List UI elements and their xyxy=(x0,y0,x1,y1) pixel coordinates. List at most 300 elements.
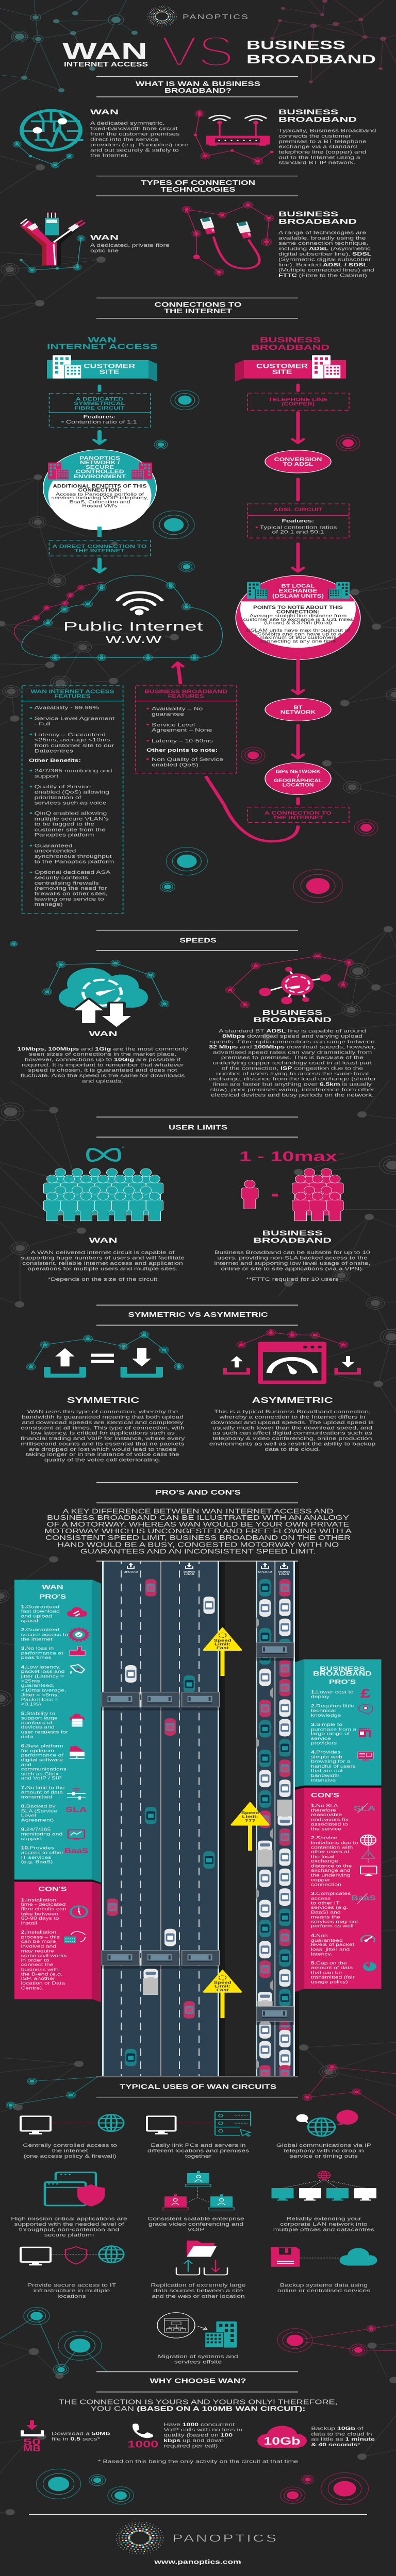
panel: WAN pros: jitter (Latency = xyxy=(20,1674,64,1679)
text: symmetric: bandwidth is guaranteed meaning that both upload xyxy=(22,1414,184,1420)
panel: WAN internet access features: Optional dedicated ASA xyxy=(35,869,110,875)
heading: typical uses of WAN circuits xyxy=(96,2077,298,2097)
box: ADSL circuit: Features: xyxy=(282,518,314,523)
icon: infinity users xyxy=(88,1146,125,1161)
panel: broadband pros: knowledge xyxy=(311,1713,341,1718)
text: WAN speeds: fluctuate. Also the speed is the same for downloads xyxy=(21,1073,185,1078)
text: business broadband definition: premises to a BT telephone xyxy=(278,139,367,144)
text: symmetric: and download speeds are identical and completely xyxy=(22,1419,184,1425)
panel: broadband cons: the local xyxy=(311,1855,334,1859)
oval: BT local exchange: EXCHANGE xyxy=(279,588,318,594)
text: asymmetric: download and upload speeds. The upload speed is xyxy=(211,1419,374,1425)
panel: business broadband features: Service Level xyxy=(152,722,195,727)
logo: Panoptics top: PANOPTICS xyxy=(183,13,248,21)
text: symmetric: SYMMETRIC xyxy=(67,1396,139,1405)
heading: symmetric vs asymmetric xyxy=(96,1305,298,1325)
heading: why choose WAN xyxy=(96,2372,298,2392)
panel: WAN cons: some civil works xyxy=(21,1954,67,1958)
decorative network: lower teal xyxy=(0,2307,107,2375)
use: link PCs and servers: different locations and premises xyxy=(147,2148,249,2154)
text: motorway analogy: A KEY DIFFERENCE BETWEEN WAN INTERNET ACCESS AND xyxy=(63,1507,334,1515)
footnote: * Based on this being the only activity on the circuit at that time xyxy=(98,2459,298,2464)
panel: broadband cons: guaranteed xyxy=(311,1938,343,1943)
oval: conversion to ADSL: TO ADSL xyxy=(283,461,314,467)
panel: broadband pros: 3.Simple to xyxy=(311,1722,342,1727)
panel: broadband cons: associated to xyxy=(311,1822,348,1827)
text: connection is yours: THE CONNECTION IS YOURS AND YOURS ONLY! THEREFORE, xyxy=(58,2398,337,2406)
use: replication of large data sources: Replication of extremely large xyxy=(151,2282,246,2288)
panel: WAN pros: and VoIP / SIP xyxy=(21,1776,62,1781)
text: WAN definition: WAN xyxy=(90,108,119,116)
panel: broadband pros: BROADBAND xyxy=(313,1671,372,1677)
panel: WAN pros: performance of xyxy=(21,1753,63,1758)
text: business broadband definition: BUSINESS xyxy=(278,108,338,116)
background network: teal and pink around typical uses xyxy=(6,2064,396,2115)
panel: WAN pros: 7.No limit to the xyxy=(21,1786,65,1790)
panel: WAN pros: 6.Best platform xyxy=(21,1744,63,1749)
use: global communications: service or timing outs xyxy=(290,2153,358,2159)
text: broadband connection types: BROADBAND xyxy=(278,217,357,226)
text: broadband user limits: BUSINESS xyxy=(262,1229,323,1237)
text: asymmetric: environments as well as restrict the ability to backup xyxy=(209,1441,376,1447)
panel: broadband pros: intensive xyxy=(311,1778,336,1783)
panel: WAN pros: user requests for xyxy=(21,1730,69,1735)
icon: asymmetric speed window xyxy=(223,1330,361,1384)
panel: WAN pros: and xyxy=(21,1762,31,1767)
panel: broadband cons: CON'S xyxy=(311,1792,339,1799)
box: telephone line copper: (COPPER) xyxy=(282,401,315,407)
icon: infinity users: * xyxy=(122,1146,125,1150)
footer url: www.panoptics.com xyxy=(154,2559,241,2565)
panel: WAN pros: (e.g. BaaS) xyxy=(21,1860,53,1865)
box: dedicated symmetrical fibre circuit: SYMMETRICAL xyxy=(74,400,125,406)
icon: broadband speed hub xyxy=(225,953,354,1008)
panel: business broadband features: guarantee xyxy=(152,711,184,717)
column heading: WAN internet access: INTERNET ACCESS xyxy=(47,342,158,351)
box: ADSL circuit: of 20:1 and 50:1 xyxy=(272,529,324,535)
panel: WAN internet access features: firewalls on other sites, xyxy=(35,891,108,896)
text: broadband connection types: digital subscriber line), SDSL xyxy=(278,251,371,257)
road edge line xyxy=(96,1561,298,1562)
footer divider xyxy=(29,2514,367,2515)
text: connection is yours: YOU CAN (BASED ON A 100MB WAN CIRCUIT): xyxy=(91,2405,305,2413)
panel: business broadband features: BUSINESS BROADBAND xyxy=(144,689,227,694)
panel: WAN internet access features: QinQ enabled allowing xyxy=(35,810,107,816)
panel: broadband pros: providers xyxy=(311,1741,337,1745)
text: broadband speeds: of the connection, ISP congestion due to the xyxy=(222,1065,364,1071)
logo: Panoptics top xyxy=(147,7,248,26)
text: WAN user limits: supporting huge numbers of users and will facilitate xyxy=(21,1255,185,1261)
use: replication of large data sources xyxy=(151,2241,246,2299)
panel: broadband cons: SLA xyxy=(354,1805,375,1812)
oval: Panoptics network: services including VOIP telephony, xyxy=(52,496,148,500)
panel: broadband cons: exchange and xyxy=(311,1869,351,1873)
text: symmetric: consistent at all times. This type of connection, with xyxy=(21,1425,185,1431)
panel: broadband cons: latency. xyxy=(311,1952,332,1957)
panel: broadband pros: browsing for a xyxy=(311,1759,351,1764)
box: dedicated symmetrical fibre circuit: Features: xyxy=(84,414,116,419)
panel: business broadband features: Latency – 10-50ms xyxy=(152,738,213,743)
panel: broadband cons: that can be xyxy=(311,1971,342,1975)
panel: broadband cons: endeavors fix xyxy=(311,1818,349,1822)
title: INTERNET ACCESS xyxy=(64,61,148,68)
sign: speed limit unknown: Limit: xyxy=(242,1815,258,1819)
panel: broadband cons: limitations due to xyxy=(311,1841,358,1845)
text: WAN definition: direct into the service xyxy=(90,137,159,142)
column heading: business broadband: BUSINESS xyxy=(260,335,321,344)
illustration: WAN private motorway: LOAD xyxy=(184,1573,195,1576)
stat: backup 10Gb: data to the cloud in xyxy=(311,2431,372,2437)
banner: WAN customer site: SITE xyxy=(100,369,119,376)
panel: WAN pros: transmitted xyxy=(21,1795,52,1800)
panel: WAN cons: 60-90 days to xyxy=(21,1917,59,1921)
panel: WAN internet access features: enabled (QoS) allowing xyxy=(35,789,109,795)
text: WAN speeds: 10Mbps, 100Mbps and 1Gig are the most commonly xyxy=(17,1046,188,1052)
stat: backup 10Gb: Backup 10Gb of xyxy=(311,2426,364,2431)
logo: Panoptics footer: PANOPTICS xyxy=(172,2533,276,2544)
text: broadband speeds: 8Mbps download speed and varying upload xyxy=(222,1033,362,1039)
oval: BT local exchange: DSLAM units have max throughput of xyxy=(246,628,350,633)
icon: public internet cloud: w.w.w xyxy=(105,632,162,646)
panel: WAN cons: time - dedicated xyxy=(21,1903,66,1907)
panel: WAN cons: in order to xyxy=(21,1958,50,1963)
panel: WAN pros: IT services xyxy=(21,1855,51,1860)
stat: 1000 VoIP calls: required per call) xyxy=(163,2443,218,2449)
illustration: broadband congested motorway xyxy=(256,1561,299,2082)
panel: WAN cons xyxy=(14,1882,101,2002)
sign: speed limit unknown: Speed xyxy=(241,1811,259,1816)
text: WAN speeds: however, connections up to 10Gig are possible if xyxy=(25,1057,181,1062)
panel: WAN pros: 9.24/7/365 xyxy=(21,1827,51,1832)
panel: broadband cons: the underlying xyxy=(311,1873,351,1878)
box: dedicated symmetrical fibre circuit: A DEDICATED xyxy=(76,396,123,402)
panel: WAN pros: PRO'S xyxy=(39,1594,66,1600)
use: migration of systems offsite: Migration of systems and xyxy=(158,2353,238,2359)
text: symmetric: taking longer or in the instance of voice calls the xyxy=(26,1451,179,1457)
panel: broadband cons xyxy=(295,1788,382,1992)
heading: what is WAN and business broadband xyxy=(96,77,298,97)
heading: speeds: SPEEDS xyxy=(179,937,217,944)
panel: WAN internet access features: synchronous throughput xyxy=(35,853,112,859)
panel: business broadband features: Availability – No xyxy=(152,706,203,711)
text: broadband speeds: electrical devices and busy periods on the network. xyxy=(211,1092,374,1098)
use: secure access to IT infrastructure: infrastructure in multiple xyxy=(34,2287,110,2293)
text: broadband connection types: same connection technique, xyxy=(278,241,368,246)
panel: WAN pros: digital software xyxy=(21,1758,63,1762)
panel: WAN internet access features: leaving one service to xyxy=(35,896,104,902)
banner: broadband customer site: SITE xyxy=(272,369,292,376)
text: broadband connection types: including ADSL (Asymmetric xyxy=(278,246,371,251)
panel: WAN internet access features: services such as voice xyxy=(35,800,107,806)
panel: WAN pros: for optimum xyxy=(21,1749,54,1753)
panel: WAN cons: take between xyxy=(21,1912,58,1917)
text: broadband speeds: lines are faster but anything over 6.5km is usually xyxy=(213,1081,372,1087)
title: WAN xyxy=(62,38,147,64)
use: video conferencing: VOIP xyxy=(187,2227,205,2232)
panel: WAN internet access features: from customer site to our xyxy=(35,742,114,748)
panel: WAN cons: 2.Installation xyxy=(21,1930,56,1935)
panel: WAN cons: 1.Installation xyxy=(21,1898,56,1903)
panel: broadband pros: purchase from a xyxy=(311,1727,356,1732)
oval: BT local exchange: 256Mbits and can have up to a xyxy=(255,632,342,637)
text: WAN definition: and out securely & safely to xyxy=(90,147,179,153)
oval: Panoptics network: ENVIRONMENT xyxy=(74,473,126,480)
title: VS xyxy=(161,28,234,75)
panel: broadband pros xyxy=(295,1659,382,1790)
panel: broadband cons: loss, jitter and xyxy=(311,1947,350,1952)
oval: Panoptics network: NETWORK / xyxy=(80,460,120,465)
box: telephone line copper xyxy=(248,385,349,410)
box: dedicated symmetrical fibre circuit: FIBRE CIRCUIT xyxy=(74,405,125,411)
text: WAN user limits: operations for multiple users and multiple sites. xyxy=(27,1266,178,1272)
heading: user limits: USER LIMITS xyxy=(169,1124,227,1131)
oval: BT local exchange: CONNECTION: xyxy=(276,610,320,615)
text: WAN definition: the Internet. xyxy=(90,152,129,158)
panel: WAN pros: devices and xyxy=(21,1725,55,1730)
text: broadband speeds: BUSINESS xyxy=(262,1008,323,1016)
panel: broadband pros: that are not xyxy=(311,1769,343,1773)
heading: connections to the internet xyxy=(96,298,298,318)
panel: broadband cons: transmitted (fair xyxy=(311,1975,355,1980)
icon: router xyxy=(194,110,273,164)
use: mission critical applications: supported with the needed level of xyxy=(14,2221,124,2227)
stat: 1000 VoIP calls: quality (based on 100 xyxy=(163,2432,233,2438)
stat: backup 10Gb: 10Gb xyxy=(264,2434,300,2447)
panel: WAN pros: such as Citrix xyxy=(21,1772,59,1776)
text: WAN speeds: and uploads. xyxy=(82,1078,123,1084)
panel: WAN pros xyxy=(14,1580,101,1884)
oval: BT local exchange: BT LOCAL xyxy=(282,583,315,589)
panel: WAN internet access features: Availability - 99.99% xyxy=(35,705,100,710)
use: backup systems data: Backup systems data using xyxy=(280,2282,368,2288)
arrow: WAN to Panoptics network xyxy=(94,432,105,444)
panel: business broadband features: Agreement – None xyxy=(152,727,212,733)
panel: WAN internet access features: Latency – Guaranteed xyxy=(35,732,106,737)
box: dedicated symmetrical fibre circuit xyxy=(50,386,151,428)
text: broadband speeds: number of users trying to access the same local xyxy=(216,1071,369,1076)
icon: ethernet cable xyxy=(182,202,274,275)
text: asymmetric xyxy=(209,1396,376,1452)
panel: broadband cons: the service xyxy=(311,1827,341,1832)
oval: Panoptics network: ADDITIONAL BENEFITS OF THIS xyxy=(53,484,147,489)
text: broadband connection types xyxy=(278,210,374,278)
panel: WAN internet access features: <25ms, average <10ms xyxy=(35,737,110,742)
box: a connection to the internet: A CONNECTION TO xyxy=(265,810,332,816)
column heading: business broadband: BROADBAND xyxy=(251,343,329,351)
column heading: WAN internet access: WAN xyxy=(88,335,117,344)
panel: WAN pros: 10.Provides xyxy=(21,1846,54,1851)
panel: WAN pros: Level xyxy=(21,1814,36,1818)
oval: BT local exchange: Average straight line distance from xyxy=(250,614,347,618)
use: secure access to IT infrastructure: Provide secure access to IT xyxy=(27,2282,117,2288)
icon: broadband users xyxy=(241,1168,343,1221)
panel: WAN pros: Packet loss = xyxy=(21,1698,58,1702)
text: broadband speeds: advertised speed rates can vary dramatically from xyxy=(213,1049,372,1055)
sign: speed limit fast: Limit: xyxy=(214,1642,230,1647)
panel: broadband pros: technical xyxy=(311,1709,336,1713)
text: broadband speeds: BROADBAND xyxy=(253,1015,332,1024)
panel: WAN internet access features: to the Panoptics platform xyxy=(35,859,114,865)
title xyxy=(62,28,376,75)
text: asymmetric: This is a typical Business Broadband connection, xyxy=(214,1409,371,1415)
panel: WAN pros: packet loss and xyxy=(21,1670,65,1674)
icon: public internet cloud: Public Internet xyxy=(63,619,203,633)
use: mission critical applications: High mission critical applications are xyxy=(11,2216,127,2222)
use: extending corporate LAN xyxy=(271,2171,376,2232)
text: broadband speeds: speeds. Fibre optic connections can range between xyxy=(210,1039,375,1044)
panel: broadband pros: 1.Lower cost to xyxy=(311,1690,354,1694)
use: mission critical applications: throughput, non-contention and xyxy=(19,2227,119,2232)
panel: broadband cons: connection xyxy=(311,1883,341,1887)
text: business broadband definition: connects the customer xyxy=(278,133,351,139)
use: link PCs and servers: Easily link PCs and servers in xyxy=(151,2143,246,2148)
text: business broadband definition: exchange via a standard xyxy=(278,144,357,149)
panel: broadband cons: therefore xyxy=(311,1808,336,1813)
stat: 1000 VoIP calls: VoIP calls with no loss in xyxy=(163,2427,242,2433)
panel: WAN pros: Jitter = <8ms, xyxy=(21,1693,59,1698)
text: broadband user limits: users, providing non-SLA backed access to the xyxy=(217,1255,368,1261)
text: asymmetric: usually much lower than the download speed, and xyxy=(212,1425,372,1431)
panel: WAN pros: SLA (Service xyxy=(21,1809,57,1814)
decorative network: lower pink xyxy=(277,2325,396,2356)
panel: broadband cons: copper xyxy=(311,1878,331,1883)
stat: 1000 VoIP calls: kbps up and down xyxy=(163,2438,224,2444)
panel: WAN pros: WAN xyxy=(42,1584,63,1591)
heading: what is WAN and business broadband: BROADBAND? xyxy=(164,87,232,94)
use: mission critical applications: secure platform xyxy=(44,2232,94,2238)
panel: WAN pros: SLA xyxy=(65,1806,87,1814)
panel: WAN cons: Centre). xyxy=(21,1986,44,1991)
text: motorway analogy: GUARANTEES AND AN INCONSISTENT SPEED LIMIT. xyxy=(80,1548,316,1555)
panel: broadband pros: deploy xyxy=(311,1695,330,1699)
use: extending corporate LAN: multiple offices and datacentres xyxy=(273,2227,374,2232)
panel: WAN internet access features: prioritisation of xyxy=(35,794,81,800)
box: ADSL circuit: ADSL CIRCUIT xyxy=(273,506,323,513)
oval: Panoptics network: CONTROLLED xyxy=(75,469,124,474)
text: WAN speeds: speed is chosen, it is guaranteed and does not xyxy=(28,1067,177,1073)
box: direct connection to the internet xyxy=(50,527,151,556)
icon: WAN globe xyxy=(13,110,82,168)
text: WAN connection type xyxy=(90,233,170,253)
oval: ISPs network: LOCATION xyxy=(283,783,314,788)
stat: 1000 VoIP calls: 1000 xyxy=(127,2439,158,2449)
stat: download 50MB: MB xyxy=(23,2443,41,2453)
use: global communications xyxy=(276,2110,371,2159)
oval: BT local exchange: (DSLAM UNITS) xyxy=(272,593,324,599)
panel: business broadband features: Other points to note: xyxy=(146,747,218,753)
panel: business broadband features: Non Quality of Service xyxy=(152,756,224,762)
panel: WAN internet access features: centralising firewalls xyxy=(35,880,99,886)
text: broadband user limits: online or site to site applications (via a VPN). xyxy=(221,1266,364,1272)
panel: WAN cons: may require xyxy=(21,1949,54,1954)
text: asymmetric: ASYMMETRIC xyxy=(252,1396,333,1405)
stat: download 50MB: Download a 50Mb xyxy=(52,2431,110,2436)
text: broadband user limits: Business Broadband can be suitable for up to 10 xyxy=(214,1249,370,1255)
panel: broadband cons: other users at xyxy=(311,1850,350,1854)
arrow: to conversion xyxy=(292,413,304,443)
banner: WAN customer site: CUSTOMER xyxy=(84,363,135,370)
arrow: to BT local exchange xyxy=(292,544,304,571)
background network: pink top right xyxy=(270,0,396,83)
text: WAN user limits: consistent, reliable internet access and application xyxy=(22,1260,183,1266)
panel: WAN pros: BaaS xyxy=(64,1847,88,1855)
text: asymmetric: whereby a connection to the Internet differs in xyxy=(219,1414,365,1420)
stat: download 50MB: file in 0.5 secs* xyxy=(52,2436,100,2442)
panel: WAN internet access features: multiple secure VLAN's xyxy=(35,816,109,822)
text: broadband connection types: FTTC (Fibre to the Cabinet) xyxy=(278,273,367,278)
oval: BT local exchange xyxy=(235,575,361,660)
text: motorway analogy: MOTORWAY WHICH IS UNCONGESTED AND FREE FLOWING WITH A xyxy=(44,1528,352,1535)
panel: broadband cons: BaaS) and xyxy=(311,1910,341,1915)
panel: WAN internet access features: Service Level Agreement xyxy=(35,716,115,721)
decorative rings: upper connections xyxy=(10,391,378,946)
text: asymmetric: as such can affect digital communications such as xyxy=(212,1430,372,1436)
use: centrally controlled access: (one access policy & firewall) xyxy=(24,2153,117,2159)
illustration: WAN private motorway: DOWN xyxy=(184,1571,195,1573)
panel: WAN internet access features: manage) xyxy=(35,902,63,907)
panel: WAN internet access features: - Full xyxy=(35,721,51,726)
text: broadband speeds: slow), poor premises wiring, interference from other xyxy=(210,1087,374,1092)
oval: BT local exchange: (Urban) & 3.370m (Rural) xyxy=(264,620,332,625)
sign: speed limit fast lower: Speed xyxy=(213,1980,232,1985)
panel: broadband pros: bandwidth xyxy=(311,1773,340,1778)
box: a connection to the internet: THE INTERNET xyxy=(273,815,324,820)
panel: broadband cons: access xyxy=(311,1896,331,1901)
text: broadband speeds: A standard BT ADSL line is capable of around xyxy=(219,1028,366,1033)
text: business broadband definition: out to the Internet using a xyxy=(278,155,360,160)
panel: WAN pros: communications xyxy=(21,1767,67,1772)
oval: ISPs network: GEOGRAPHICAL xyxy=(274,778,322,783)
panel: broadband cons: 1.No SLA xyxy=(311,1804,338,1808)
illustration: WAN private motorway xyxy=(102,1561,225,2076)
text: motorway analogy: HAND WOULD BE A BUSY, CONGESTED MOTORWAY WITH NO xyxy=(57,1541,339,1548)
stat: backup 10Gb: & 40 seconds* xyxy=(311,2442,360,2447)
text: broadband user limits xyxy=(214,1229,371,1282)
panel: WAN pros: the internet xyxy=(21,1637,53,1642)
panel: WAN internet access features: uncontended xyxy=(35,848,76,854)
box: direct connection to the internet: A DIRECT CONNECTION TO xyxy=(52,544,146,549)
panel: WAN internet access features: Guaranteed xyxy=(35,843,72,849)
arrow: curved link back to features xyxy=(206,776,298,841)
heading: what is WAN and business broadband: WHAT IS WAN & BUSINESS xyxy=(136,80,260,88)
arrow: to BT network xyxy=(292,660,304,694)
box: telephone line copper: TELEPHONE LINE xyxy=(268,397,328,402)
panel: WAN cons: connect the xyxy=(21,1963,54,1968)
panel: WAN pros: 1.Guaranteed xyxy=(21,1605,59,1609)
panel: broadband pros: £ xyxy=(360,1686,371,1701)
oval: BT network: BT xyxy=(294,704,303,710)
sign: speed limit fast: Fast xyxy=(217,1646,229,1651)
panel: broadband cons: distance to the xyxy=(311,1864,352,1869)
use: migration of systems offsite: services offsite xyxy=(174,2359,222,2365)
oval: Panoptics network: SECURE xyxy=(86,464,114,470)
column heading: WAN internet access xyxy=(47,335,158,351)
title: BROADBAND xyxy=(246,53,376,66)
arrow: to ISPs network xyxy=(292,725,304,758)
panel: broadband cons: means the xyxy=(311,1915,340,1920)
heading: user limits xyxy=(96,1117,298,1137)
use: global communications: Global communications via IP xyxy=(276,2143,371,2148)
text: business broadband definition: BROADBAND xyxy=(278,115,357,124)
use: video conferencing: grade video conferencing and xyxy=(148,2221,243,2227)
panel: WAN internet access features: Other Benefits: xyxy=(29,757,81,763)
box: a connection to the internet xyxy=(248,799,349,823)
heading: pros and cons xyxy=(96,1483,298,1503)
text: WAN speeds: required. It is important to remember that whatever xyxy=(22,1062,184,1067)
decorative rings: footer pink xyxy=(280,2472,369,2505)
sign: speed limit fast xyxy=(203,1628,242,1676)
panel: WAN internet access features: customer site from the xyxy=(35,827,106,833)
